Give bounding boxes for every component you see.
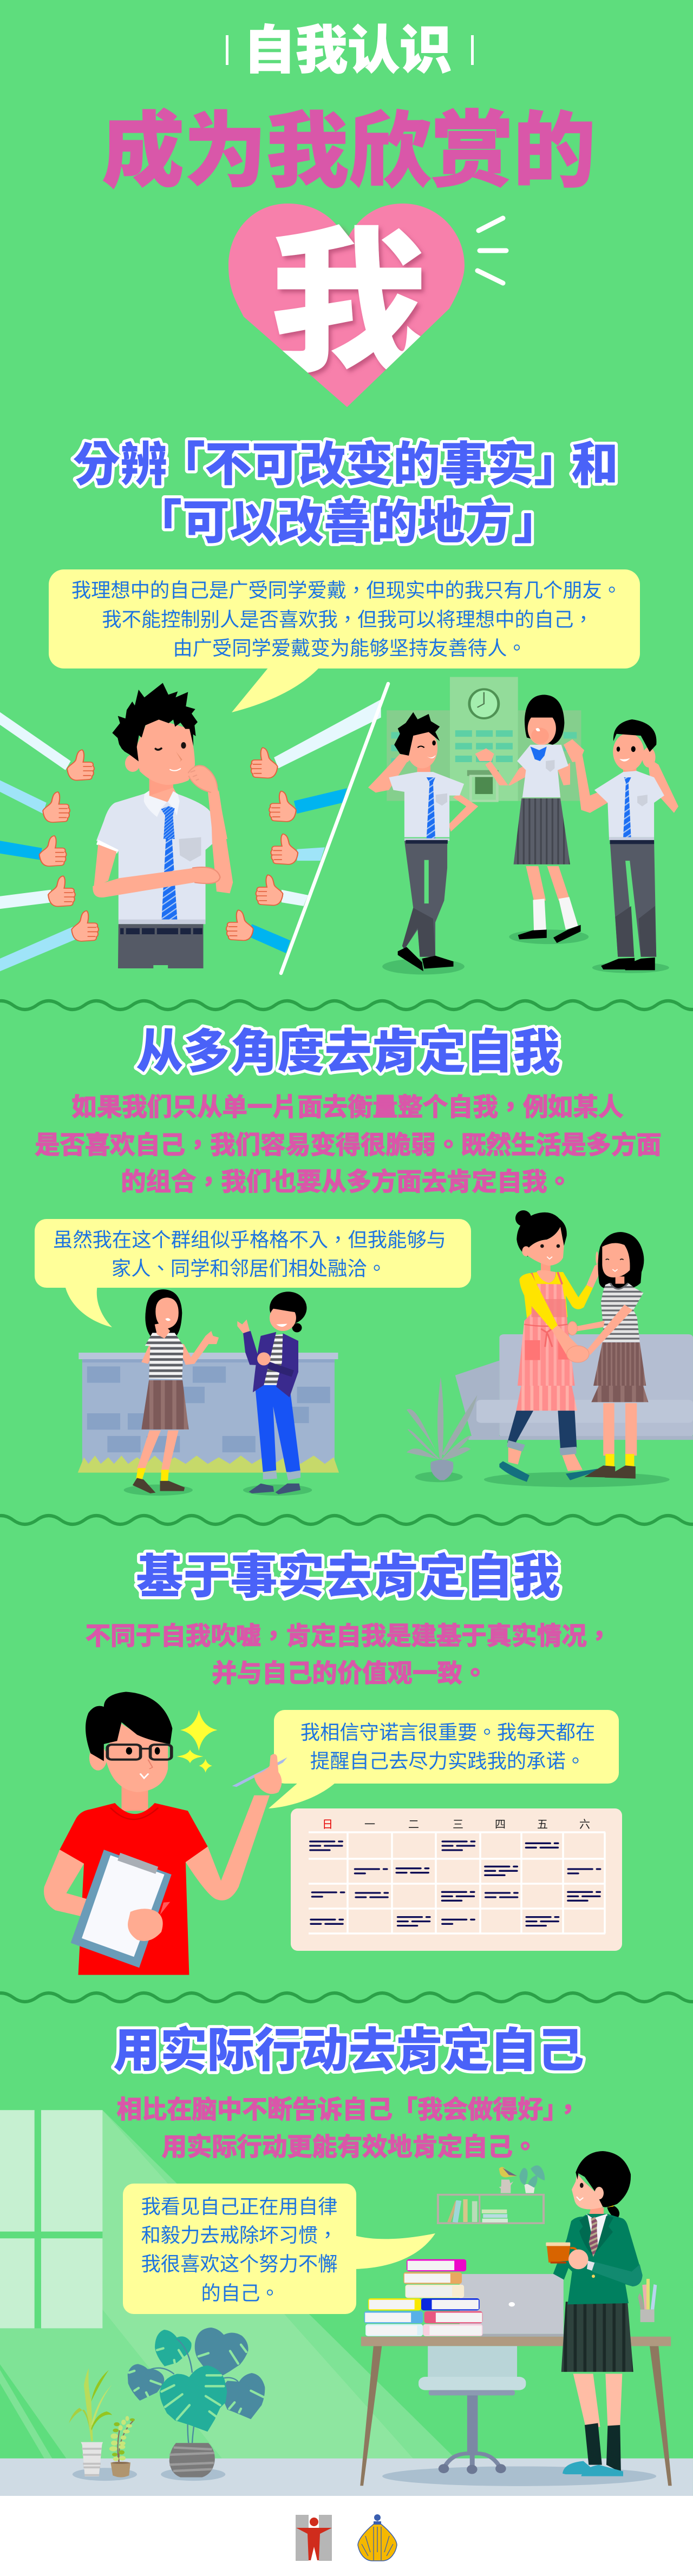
speech bubble: section one: 我不能控制别人是否喜欢我，但我可以将理想中的自己， [102, 608, 593, 631]
sparkles [177, 1710, 218, 1773]
mother and daughter upper bodies [515, 1210, 646, 1386]
speech bubble: section four: 我很喜欢这个努力不懈 [141, 2253, 337, 2275]
sunlight beam [0, 2110, 455, 2459]
floor shadows [73, 2466, 656, 2486]
heading: section one: 和 [571, 438, 618, 491]
weekday labels: 五 [537, 1819, 548, 1831]
speech bubble: section four: 的自己。 [201, 2282, 280, 2304]
daughter legs and skirt hem [584, 1375, 649, 1479]
brick wall [78, 1353, 339, 1473]
heading: section one: 可以改善的地方 [182, 496, 512, 549]
large boy head [112, 683, 227, 839]
boy one with hand on hip [368, 712, 478, 974]
daughter upper body [567, 1232, 646, 1386]
speech bubble: section one: 由广受同学爱戴变为能够坚持友善待人。 [173, 637, 527, 659]
calendar panel [291, 1808, 622, 1951]
body text: section four: 用实际行动更能有效地肯定自己。 [162, 2133, 538, 2161]
heading: section four: 用实际行动去肯定自己 [113, 2024, 584, 2077]
speech bubble: section three: 提醒自己去尽力实践我的承诺。 [310, 1750, 585, 1772]
speech bubble: section two: 虽然我在这个群组似乎格格不入，但我能够与 [53, 1229, 446, 1251]
laptop [460, 2274, 564, 2337]
title kicker: 自我认识 [244, 22, 452, 80]
weekday labels: 六 [579, 1818, 590, 1831]
girl in the middle [475, 694, 589, 944]
background school building [387, 677, 581, 801]
tall potted plant [69, 2368, 112, 2476]
wall shelf with books [438, 2195, 544, 2223]
girl with striped shirt [124, 1289, 219, 1496]
mother legs and apron hem [484, 1362, 670, 1487]
illustration: section two [78, 1289, 693, 1496]
main title: 成为我欣赏的 [102, 106, 596, 198]
office chair [419, 2346, 526, 2474]
body text: section two: 是否喜欢自己，我们容易变得很脆弱。既然生活是多方面 [35, 1131, 662, 1159]
icon: heart with the character me [228, 204, 506, 407]
weekday labels: 四 [495, 1819, 506, 1831]
girl legs and skirt [561, 2302, 633, 2476]
speech bubble: section one: 我理想中的自己是广受同学爱戴，但现实中的我只有几个朋友。 [71, 579, 622, 601]
heading: section one [73, 438, 618, 549]
weekday labels [322, 1818, 590, 1831]
logo: red figure [296, 2515, 332, 2561]
girl in purple cardigan [237, 1292, 312, 1496]
boy body [44, 1781, 270, 1975]
speech bubble: section four [123, 2184, 435, 2314]
thumbs up arms right [226, 699, 381, 953]
body text: section four: 相比在脑中不断告诉自己「我会做得好」， [117, 2095, 580, 2123]
girl upper body [546, 2151, 643, 2304]
boy head [86, 1692, 172, 1792]
wave divider one [0, 1001, 693, 1010]
illustration: boy with glasses [44, 1692, 287, 1975]
weekday labels: 日 [322, 1819, 333, 1831]
body text: section three [86, 1622, 612, 1687]
body text: section three: 并与自己的价值观一致。 [212, 1659, 488, 1687]
heading: section three: 基于事实去肯定自我 [136, 1551, 560, 1603]
body text: section two [35, 1093, 662, 1196]
speech bubble: section four: 和毅力去戒除坏习惯， [141, 2224, 337, 2246]
desk [360, 2337, 672, 2486]
boy three waving [564, 719, 678, 973]
pencil holder [638, 2279, 657, 2322]
wave divider three [0, 1993, 693, 2002]
monstera plant [128, 2328, 265, 2477]
illustration: room background [0, 2110, 693, 2496]
mother upper body [515, 1210, 599, 1386]
speech bubble: section two: 家人、同学和邻居们相处融洽。 [112, 1257, 387, 1280]
small shelf plant [519, 2165, 545, 2193]
wave divider two [0, 1516, 693, 1524]
weekday labels: 一 [364, 1819, 375, 1831]
window [0, 2110, 102, 2328]
speech bubble: section three [269, 1710, 619, 1808]
stack of books [364, 2259, 482, 2336]
thumbs up arms left [0, 712, 99, 971]
bird on vase [499, 2167, 517, 2193]
heading: section one: 「 [158, 438, 205, 491]
pen and raised hand [232, 1754, 287, 1794]
body text: section three: 不同于自我吹嘘，肯定自我是建基于真实情况， [86, 1622, 612, 1650]
girl upper body and desk items [499, 2151, 657, 2322]
sofa [455, 1334, 693, 1440]
heading: section one: 不可改变的事实 [205, 438, 534, 491]
body text: section two: 如果我们只从单一片面去衡量整个自我，例如某人 [72, 1093, 623, 1121]
footer white band [0, 2496, 693, 2576]
body text: section four [117, 2095, 580, 2161]
plants [69, 2328, 265, 2477]
heading: section one: 「 [135, 496, 182, 549]
weekday labels: 三 [453, 1819, 463, 1831]
illustration: section one [0, 699, 381, 971]
speech bubble: section one [49, 569, 640, 712]
body text: section two: 的组合，我们也要从多方面去肯定自我。 [121, 1168, 572, 1196]
icon: heart with the character me: 我 [270, 216, 428, 392]
illustration: study room [360, 2195, 672, 2486]
heading: section one: 」 [514, 496, 561, 549]
speech bubble: section two [35, 1219, 471, 1327]
heading: section one: 分辨 [73, 438, 167, 491]
speech bubble: section three: 我相信守诺言很重要。我每天都在 [300, 1721, 595, 1743]
heading: section one: 」 [534, 438, 581, 491]
potted plant [407, 1377, 478, 1482]
logo: golden hands [358, 2514, 397, 2561]
small potted plant [109, 2416, 135, 2477]
calendar entries [309, 1840, 601, 1926]
weekday labels: 二 [408, 1819, 419, 1831]
heading: section two: 从多角度去肯定自我 [136, 1026, 560, 1078]
clipboard [71, 1850, 172, 1968]
hand on clipboard [128, 1909, 163, 1941]
large boy body [93, 790, 233, 968]
speech bubble: section four: 我看见自己正在用自律 [141, 2195, 337, 2218]
divider line [281, 684, 388, 973]
floor [0, 2459, 693, 2496]
